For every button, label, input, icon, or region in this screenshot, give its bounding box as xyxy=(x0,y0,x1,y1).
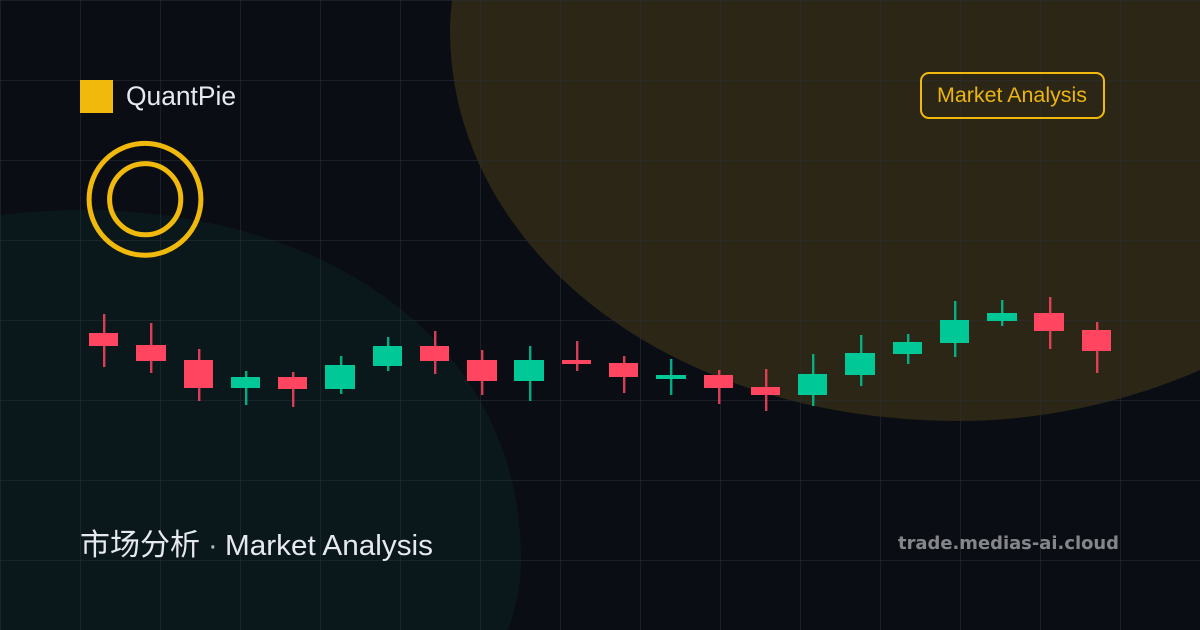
badge: Market Analysis: Market Analysis xyxy=(937,83,1087,107)
candlestick chart xyxy=(89,297,1111,411)
candle 2 xyxy=(136,323,166,373)
candle 21 xyxy=(1034,297,1064,349)
icon: concentric rings xyxy=(89,143,201,255)
candle 19 xyxy=(940,301,969,357)
candle 13 xyxy=(656,359,686,395)
candle 10 xyxy=(514,346,544,401)
candle 15 xyxy=(751,369,780,411)
domain label: trade.medias-ai.cloud xyxy=(898,533,1119,554)
amber background shape xyxy=(450,0,1200,421)
candle 20 xyxy=(987,300,1017,326)
candle 12 xyxy=(609,356,638,393)
candle 14 xyxy=(704,370,733,404)
candle 8 xyxy=(420,331,449,374)
candle 6 xyxy=(325,356,355,394)
brand name: QuantPie xyxy=(126,81,236,111)
candle 5 xyxy=(278,372,307,407)
candle 17 xyxy=(845,335,875,386)
candle 11 xyxy=(562,341,591,371)
title: · xyxy=(208,530,218,562)
title xyxy=(80,529,433,562)
logo square xyxy=(80,80,113,113)
candle 3 xyxy=(184,349,213,401)
title: Market Analysis xyxy=(225,530,433,562)
candle 16 xyxy=(798,354,827,406)
candle 7 xyxy=(373,337,402,371)
candle 4 xyxy=(231,371,260,405)
teal background shape xyxy=(0,210,521,630)
badge: Market Analysis xyxy=(921,73,1104,118)
candle 18 xyxy=(893,334,922,364)
candle 9 xyxy=(467,350,497,395)
candle 22 xyxy=(1082,322,1111,373)
title: 市场分析 xyxy=(80,529,200,562)
candle 1 xyxy=(89,314,118,367)
